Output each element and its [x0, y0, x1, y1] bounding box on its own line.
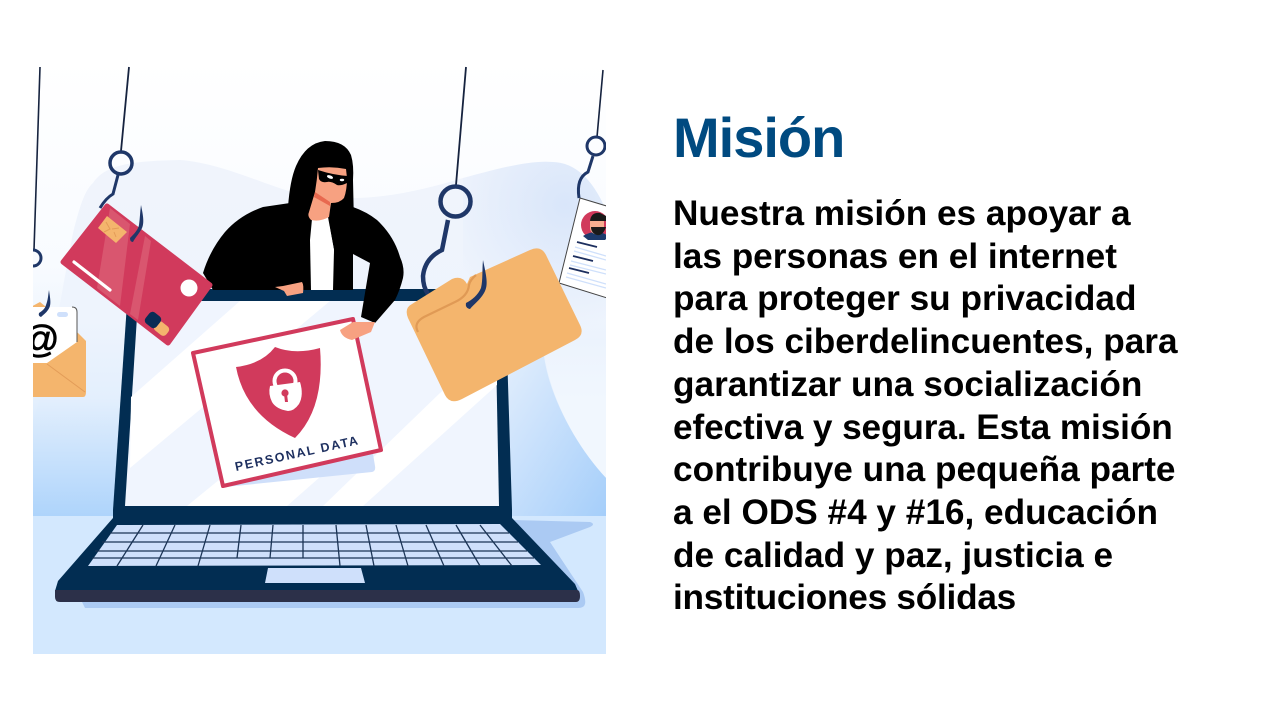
face: [308, 167, 347, 221]
envelope with at sign: [33, 302, 86, 397]
folder: [407, 248, 582, 401]
card barb: [130, 205, 143, 242]
laptop lid: [113, 289, 512, 518]
hook far left: [33, 67, 42, 268]
laptop: [55, 289, 593, 608]
envelope barb: [39, 290, 50, 317]
eyes: [326, 174, 344, 181]
mission text: instituciones sólidas: [673, 578, 1016, 617]
mission text: de los ciberdelincuentes, para: [673, 322, 1178, 361]
right hand: [340, 322, 375, 340]
backdrop: [33, 160, 606, 654]
mission text: para proteger su privacidad: [673, 279, 1136, 318]
envelope with at sign: @: [21, 319, 60, 361]
fishing lines and hooks behind folder: [25, 67, 605, 294]
personal data card: [193, 319, 381, 486]
left hand: [275, 282, 303, 296]
folder barb: [466, 260, 487, 309]
hair: [288, 141, 354, 225]
mask: [318, 170, 348, 185]
card logo: [144, 312, 170, 336]
credit card on hook: [63, 206, 210, 343]
mission text: Nuestra misión es apoyar a: [673, 194, 1131, 233]
keyboard: [88, 524, 541, 566]
title: Misión: [673, 106, 844, 169]
jacket left: [203, 203, 315, 290]
laptop screen: [125, 301, 499, 506]
document lines: [566, 242, 606, 288]
shirt: [310, 217, 334, 290]
hook for card: [100, 67, 132, 208]
hook for document: [578, 70, 605, 198]
mission text: contribuye una pequeña parte: [673, 450, 1176, 489]
card stripe: [74, 262, 110, 290]
avatar: [581, 211, 606, 240]
personal data label: PERSONAL DATA: [234, 433, 361, 474]
icon: shield: [236, 347, 321, 438]
mouth shade: [314, 192, 330, 206]
mission text: [673, 194, 1178, 617]
laptop base front edge: [55, 590, 580, 602]
card shadow: [230, 454, 376, 486]
trackpad: [265, 568, 365, 583]
jacket right: [328, 207, 404, 323]
card dot: [180, 280, 198, 296]
mission text: las personas en el internet: [673, 237, 1117, 276]
hook for folder: [423, 67, 470, 294]
mission text: de calidad y paz, justicia e: [673, 536, 1113, 575]
icon: padlock: [269, 370, 302, 411]
laptop base: [55, 518, 578, 591]
resume document: [558, 198, 606, 298]
card chip: [98, 216, 127, 243]
mission text: efectiva y segura. Esta misión: [673, 408, 1173, 447]
laptop shadow: [81, 520, 593, 608]
hook barbs: [39, 205, 487, 317]
illustration: phishing hacker and laptop: [33, 66, 606, 654]
mission text: garantizar una socialización: [673, 365, 1142, 404]
mission text: a el ODS #4 y #16, educación: [673, 493, 1158, 532]
hacker figure: [203, 141, 404, 340]
